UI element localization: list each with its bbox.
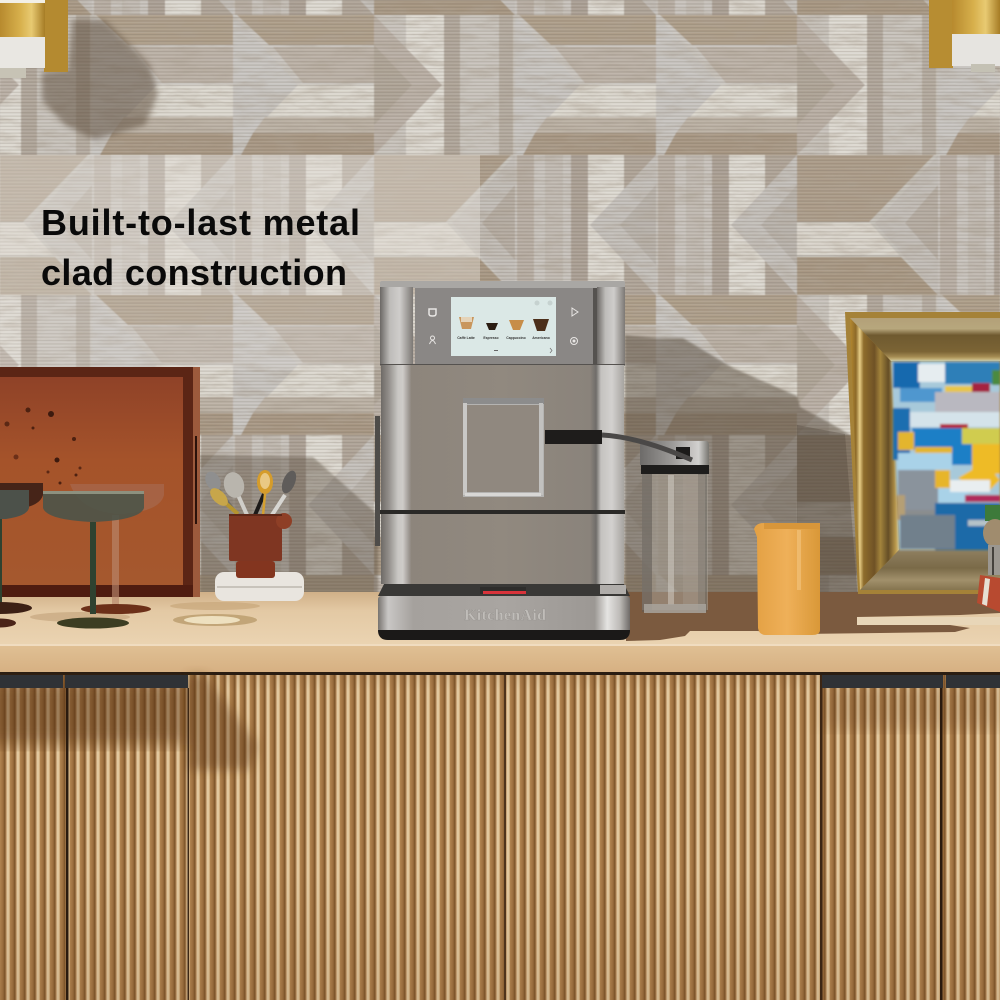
milk tube	[545, 430, 692, 460]
fluted wood cabinet	[0, 675, 1000, 1000]
touch screen	[451, 297, 556, 356]
glass container	[642, 470, 708, 613]
burl wood tray	[0, 367, 200, 597]
touch screen: Espresso	[483, 336, 499, 340]
title	[41, 202, 360, 293]
gold framed painting	[845, 312, 1000, 594]
lower body	[381, 514, 624, 584]
countertop	[0, 592, 1000, 675]
title: Built-to-last metal	[41, 202, 360, 243]
metal lid	[640, 441, 709, 465]
touch screen: Americano	[532, 336, 550, 340]
cup: caffe latte	[459, 317, 474, 329]
machine side handle	[375, 416, 380, 546]
cup: cappuccino	[509, 320, 524, 330]
icon: play	[572, 308, 578, 316]
terracotta utensil pot	[229, 513, 292, 578]
brown coupe glass	[70, 484, 164, 614]
icon: power dial	[570, 338, 578, 344]
plant and books on right	[977, 505, 1000, 612]
wall shadows	[42, 20, 860, 600]
coupe glasses	[0, 483, 164, 628]
body seam	[380, 510, 625, 514]
painting	[891, 361, 1000, 550]
wallpaper: geometric tile pattern	[0, 0, 1000, 600]
frame	[845, 312, 1000, 594]
touch screen: Caffè Latte	[457, 336, 475, 340]
coffee machine	[375, 281, 692, 640]
icon: person	[430, 336, 436, 344]
shadow on counter	[626, 592, 1000, 641]
title: clad construction	[41, 252, 347, 293]
brand logo: KitchenAid	[464, 607, 546, 624]
coffee spout door	[463, 398, 544, 497]
left glasses	[0, 483, 43, 628]
upper column left	[380, 287, 413, 365]
cabinet handles	[0, 675, 1000, 688]
upper column right	[597, 287, 625, 365]
cup: espresso	[486, 323, 498, 330]
spoons	[202, 469, 299, 515]
orange ceramic jug	[754, 523, 820, 635]
milk jug	[640, 441, 709, 613]
control panel	[415, 288, 593, 364]
base tray	[378, 584, 630, 640]
icon: cup	[429, 309, 436, 316]
sconce: top left	[0, 0, 68, 78]
main body	[381, 365, 624, 510]
red indicator	[483, 591, 526, 594]
top cap	[380, 281, 625, 288]
green coupe glass	[43, 491, 144, 628]
marble coaster	[215, 572, 304, 601]
sconce: top right	[929, 0, 1000, 72]
touch screen: Cappuccino	[506, 336, 526, 340]
cup: americano	[533, 319, 549, 331]
